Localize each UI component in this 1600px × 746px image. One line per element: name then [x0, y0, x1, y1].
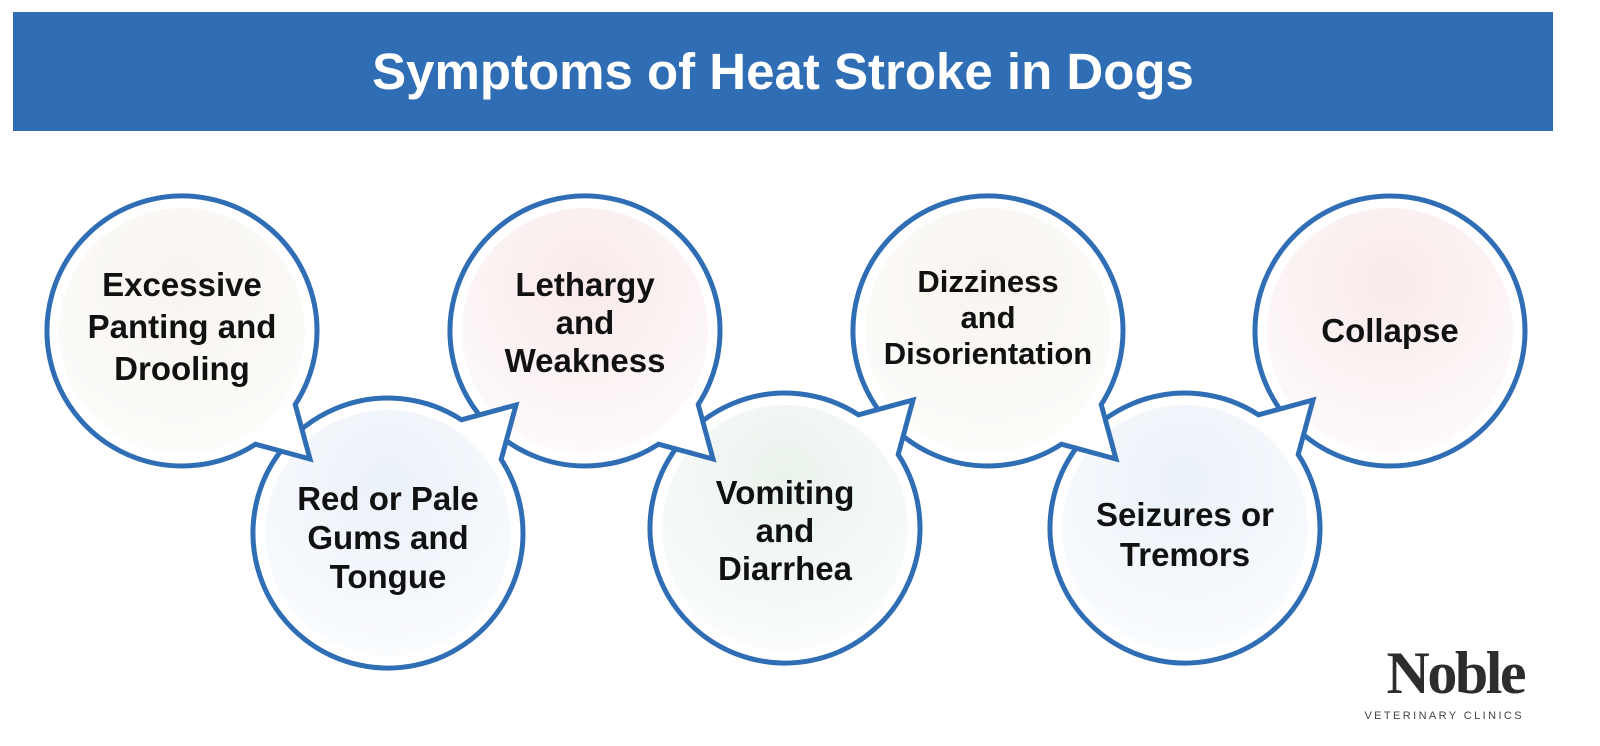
- bubble: excessive panting: Panting and: [88, 308, 276, 345]
- logo: VETERINARY CLINICS: [1364, 710, 1524, 722]
- title banner: Symptoms of Heat Stroke in Dogs: [372, 43, 1194, 100]
- bubble: dizziness: [853, 196, 1123, 466]
- logo: Noble: [1386, 640, 1526, 706]
- bubble: collapse: [1255, 196, 1525, 466]
- bubble: excessive panting: Excessive: [102, 266, 262, 303]
- logo: [1364, 640, 1526, 722]
- title banner: [13, 12, 1553, 131]
- bubble: dizziness: and: [960, 300, 1016, 335]
- bubble: red or pale gums: Gums and: [307, 519, 469, 556]
- bubble: lethargy: and: [556, 304, 614, 341]
- bubble: seizures: Tremors: [1120, 536, 1250, 573]
- bubble: seizures: Seizures or: [1096, 496, 1274, 533]
- bubble: red or pale gums: [253, 398, 523, 668]
- bubble: lethargy: Lethargy: [515, 266, 655, 303]
- bubble: vomiting: [650, 393, 920, 663]
- bubble: red or pale gums: Red or Pale: [297, 480, 479, 517]
- bubble: seizures: [1050, 393, 1320, 663]
- bubble: vomiting: Vomiting: [716, 474, 854, 511]
- bubble: red or pale gums: Tongue: [330, 558, 446, 595]
- bubble: vomiting: Diarrhea: [718, 550, 853, 587]
- bubble: lethargy: [450, 196, 720, 466]
- bubble: dizziness: Disorientation: [884, 336, 1092, 371]
- bubble: vomiting: and: [756, 512, 814, 549]
- bubble: collapse: Collapse: [1321, 312, 1459, 349]
- bubble: lethargy: Weakness: [505, 342, 665, 379]
- bubble: excessive panting: Drooling: [114, 350, 250, 387]
- bubble: excessive panting: [47, 196, 317, 466]
- bubble: dizziness: Dizziness: [917, 264, 1059, 299]
